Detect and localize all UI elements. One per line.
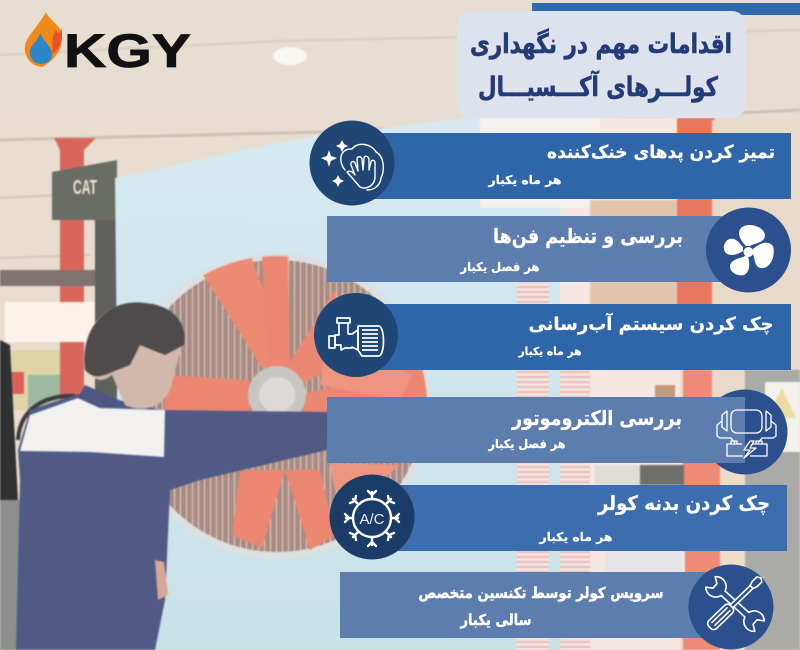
- icon: flame and water drop: [25, 12, 62, 67]
- title text: [470, 28, 732, 103]
- title text: اقدامات مهم در نگهداری: [470, 28, 732, 60]
- row 3: check water system: چک کردن سیستم آب‌رسانی: [528, 312, 774, 335]
- icon: A/C snowflake: A/C: [359, 511, 385, 528]
- icon: fan: [706, 208, 791, 292]
- top accent bar: [532, 3, 800, 15]
- background photo: workshop with axial cooler: CAT: [73, 177, 97, 199]
- row 1: clean cooling pads: هر ماه یکبار: [487, 173, 562, 187]
- row 5: check cooler body: هر ماه یکبار: [538, 530, 612, 544]
- row 3: check water system: [314, 293, 791, 377]
- icon: cleaning hand: [310, 120, 394, 206]
- cooler body: [115, 116, 640, 650]
- right side of photo: [560, 118, 680, 650]
- row 1: clean cooling pads: [310, 120, 791, 206]
- fan: [150, 253, 430, 559]
- row 1: clean cooling pads: تمیز کردن پدهای خنک‌کننده: [547, 142, 775, 163]
- row 2: check fans: [327, 208, 791, 292]
- title text: کولـــرهای آکـــسیـــال: [478, 70, 718, 103]
- row 4: check electromotor: [327, 390, 788, 474]
- logo: KGY: [25, 12, 191, 77]
- row 3: check water system: هر ماه یکبار: [518, 345, 582, 358]
- row 2: check fans: بررسی و تنظیم فن‌ها: [493, 224, 683, 248]
- title panel: [457, 11, 746, 118]
- icon: A/C snowflake: [330, 474, 414, 560]
- row 6: technician service: سالی یکبار: [460, 611, 532, 629]
- icon: wrench and screwdriver: [688, 564, 774, 650]
- icon: electromotor: [717, 410, 776, 458]
- red column left: [54, 138, 96, 405]
- row 4 heading: بررسی الکتروموتور: [511, 406, 682, 430]
- row 4 frequency: هر فصل یکبار: [488, 437, 566, 451]
- worker: [16, 392, 330, 650]
- red fan tips beyond ring: [320, 345, 412, 400]
- row 5: check cooler body: چک کردن بدنه کولر: [597, 491, 770, 516]
- icon: water pump motor: [314, 293, 398, 377]
- row 5: check cooler body: [330, 474, 787, 560]
- icon disc: electromotor: [702, 390, 788, 474]
- row 2: check fans: هر فصل یکبار: [460, 260, 540, 274]
- row 4 bar: [327, 397, 745, 463]
- row 6: technician service: [340, 564, 774, 650]
- row 6: technician service: سرویس کولر توسط تکنسین متخصص: [418, 584, 664, 602]
- wordmark: KGY: [64, 24, 191, 77]
